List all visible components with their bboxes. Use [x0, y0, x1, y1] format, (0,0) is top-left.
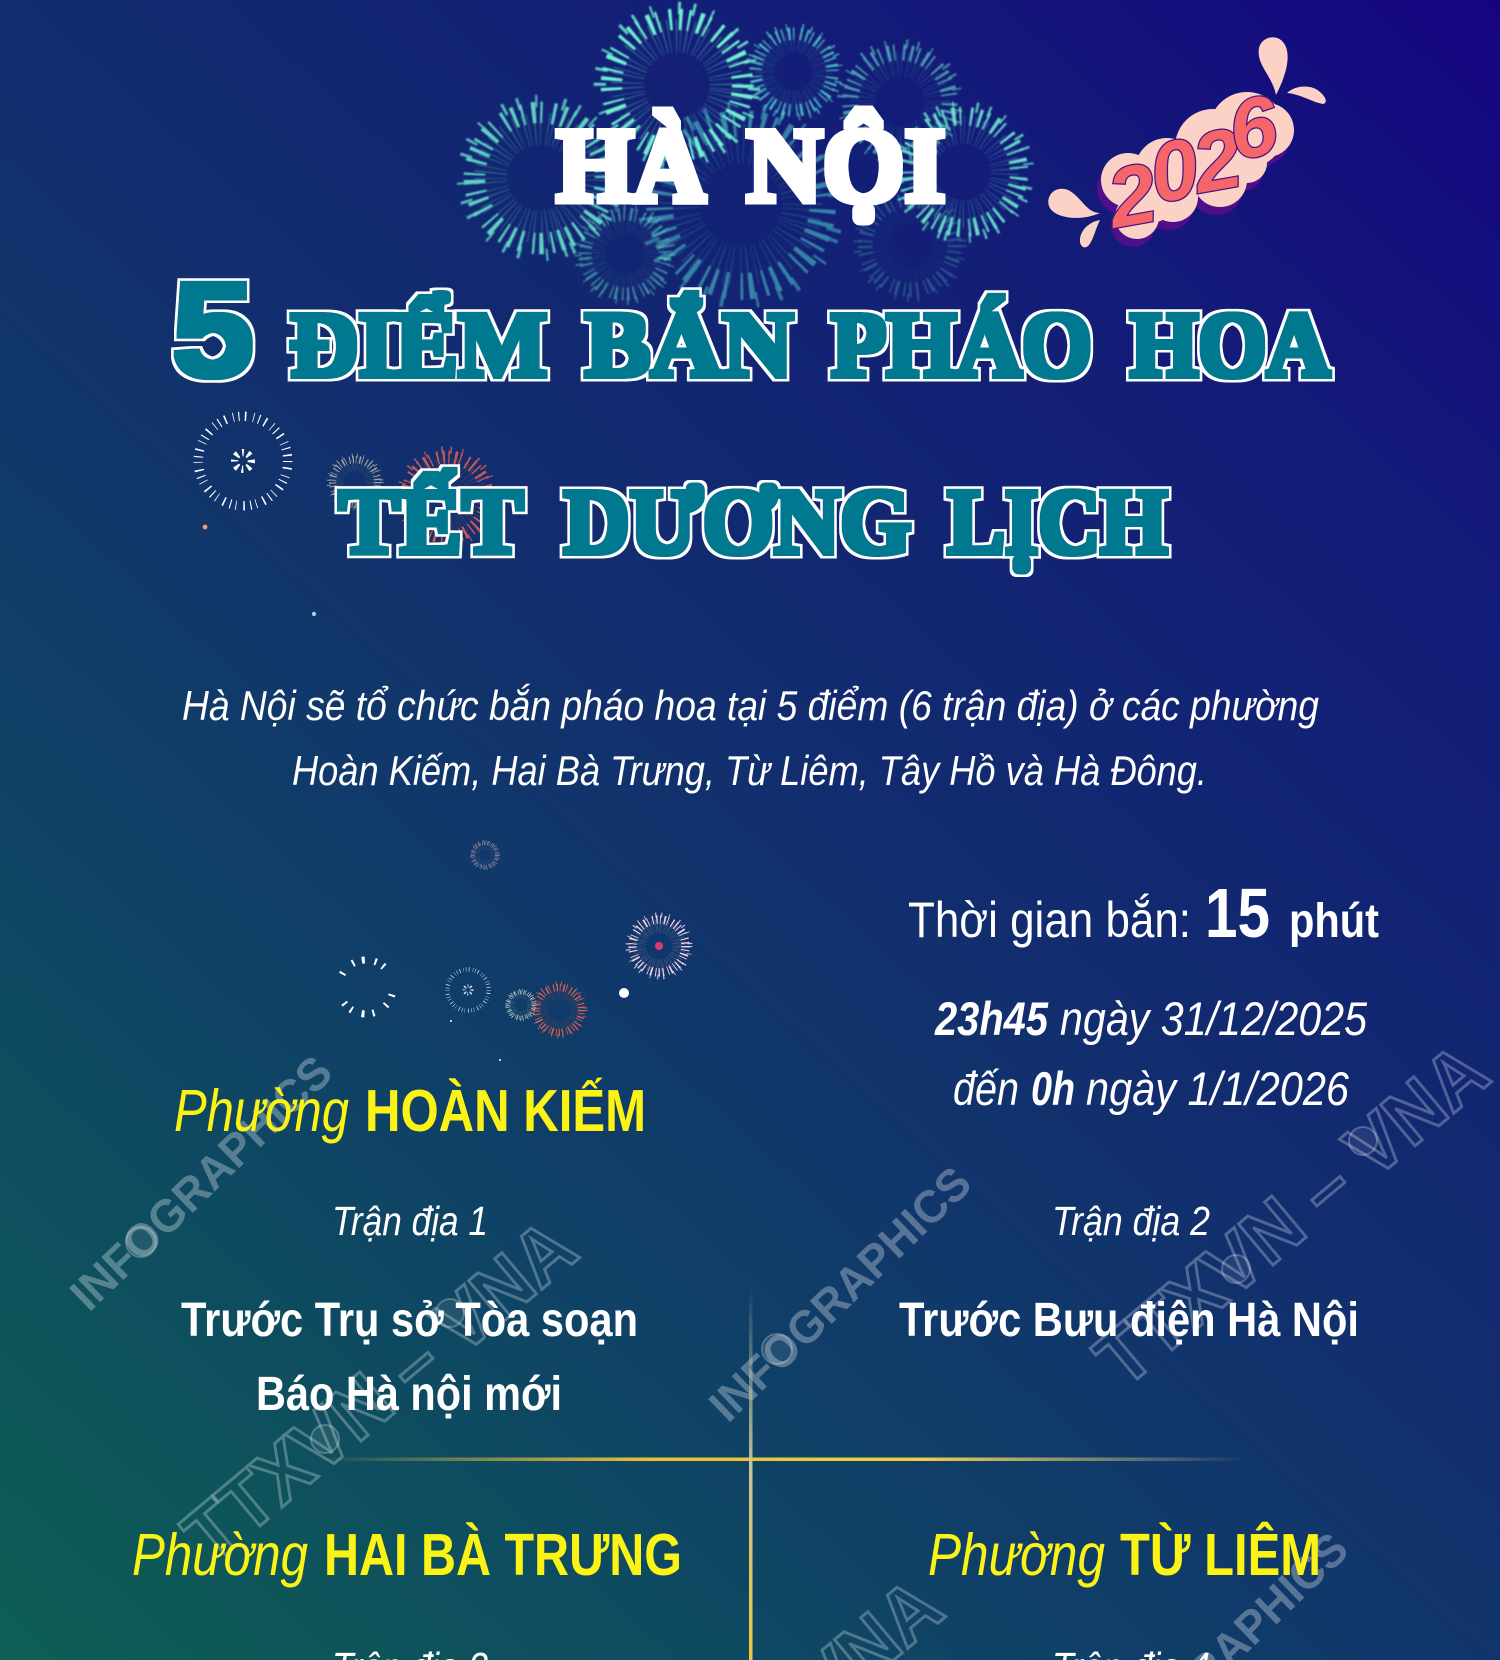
ward heading: HAI BÀ TRƯNG — [324, 1522, 682, 1588]
intro paragraph: Hoàn Kiếm, Hai Bà Trưng, Từ Liêm, Tây Hồ và Hà Đông. — [292, 747, 1207, 794]
vertical gold rule — [749, 1286, 752, 1660]
badge: 2026 — [1048, 37, 1326, 247]
numeral 5: 5 — [172, 256, 254, 405]
duration heading: 15 — [1205, 874, 1270, 952]
horizontal gold rule — [318, 1458, 1249, 1461]
fireworks: small bursts above Hoàn Kiếm — [328, 841, 690, 1061]
headline line one: PHÁO — [831, 294, 1092, 397]
site address — [181, 1294, 638, 1421]
start time: 23h45 — [934, 992, 1049, 1045]
intro paragraph: Hà Nội sẽ tổ chức bắn pháo hoa tại 5 điểm (6 trận địa) ở các phường — [182, 682, 1319, 729]
ward heading: Phường — [132, 1522, 308, 1588]
headline line two: LỊCH — [948, 471, 1168, 574]
duration heading — [908, 874, 1379, 952]
watermarks — [60, 1026, 1500, 1660]
ward heading — [928, 1521, 1321, 1588]
headline line one: BẮN — [584, 293, 794, 397]
title: 5 điểm bắn pháo hoa, Tết Dương lịch — [172, 256, 1330, 574]
end time: ngày 1/1/2026 — [1086, 1062, 1350, 1115]
ward heading: Phường — [174, 1078, 349, 1144]
ward heading: TỪ LIÊM — [1120, 1521, 1321, 1588]
site label: Trận địa 2 — [1052, 1198, 1210, 1244]
ward heading — [174, 1078, 646, 1144]
start time: ngày 31/12/2025 — [1060, 992, 1368, 1045]
headline line two — [338, 470, 1168, 574]
end time: đến — [953, 1062, 1019, 1115]
duration block — [908, 874, 1379, 1115]
watermarks: INFOGRAPHICS — [60, 1045, 342, 1320]
headline line one: ĐIỂM — [290, 293, 548, 397]
title: Hà Nội — [556, 107, 946, 224]
badge blob — [1101, 92, 1294, 239]
badge shadow — [1097, 100, 1290, 247]
end time: 0h — [1031, 1062, 1075, 1115]
headline line two: TẾT — [338, 470, 524, 574]
site label: Trận địa 1 — [332, 1198, 488, 1244]
panel: Bưu điện — [899, 1198, 1359, 1347]
headline line two: DƯƠNG — [564, 471, 912, 574]
site address: Trước Bưu điện Hà Nội — [899, 1294, 1359, 1347]
ward heading — [132, 1522, 682, 1588]
badge drops — [1048, 37, 1326, 247]
headline line one — [290, 293, 1330, 397]
intro paragraph — [182, 682, 1319, 794]
panel: Hai Bà Trưng — [132, 1522, 682, 1660]
headline line one: HOA — [1130, 294, 1330, 397]
watermarks: INFOGRAPHICS — [699, 1156, 981, 1431]
site address: Báo Hà nội mới — [256, 1368, 562, 1421]
ward heading: HOÀN KIẾM — [365, 1078, 646, 1144]
fireworks: small bursts left of second title line — [198, 416, 494, 616]
duration heading: Thời gian bắn: — [908, 892, 1191, 948]
ward heading: Phường — [928, 1522, 1105, 1588]
fireworks: teal cluster behind the title — [441, 0, 1047, 328]
site address: Trước Trụ sở Tòa soạn — [181, 1294, 638, 1347]
title: Hà Nội: HÀ — [556, 107, 706, 224]
panel: Hoàn Kiếm — [174, 1078, 646, 1421]
start time — [934, 992, 1368, 1045]
title: Hà Nội: NỘI — [746, 107, 946, 224]
panel: Từ Liêm — [928, 1521, 1321, 1660]
badge numerals: 2026 — [1099, 77, 1285, 246]
duration heading: phút — [1289, 895, 1379, 948]
watermarks: TTXVN – VNA — [166, 1202, 592, 1579]
end time — [953, 1062, 1350, 1115]
